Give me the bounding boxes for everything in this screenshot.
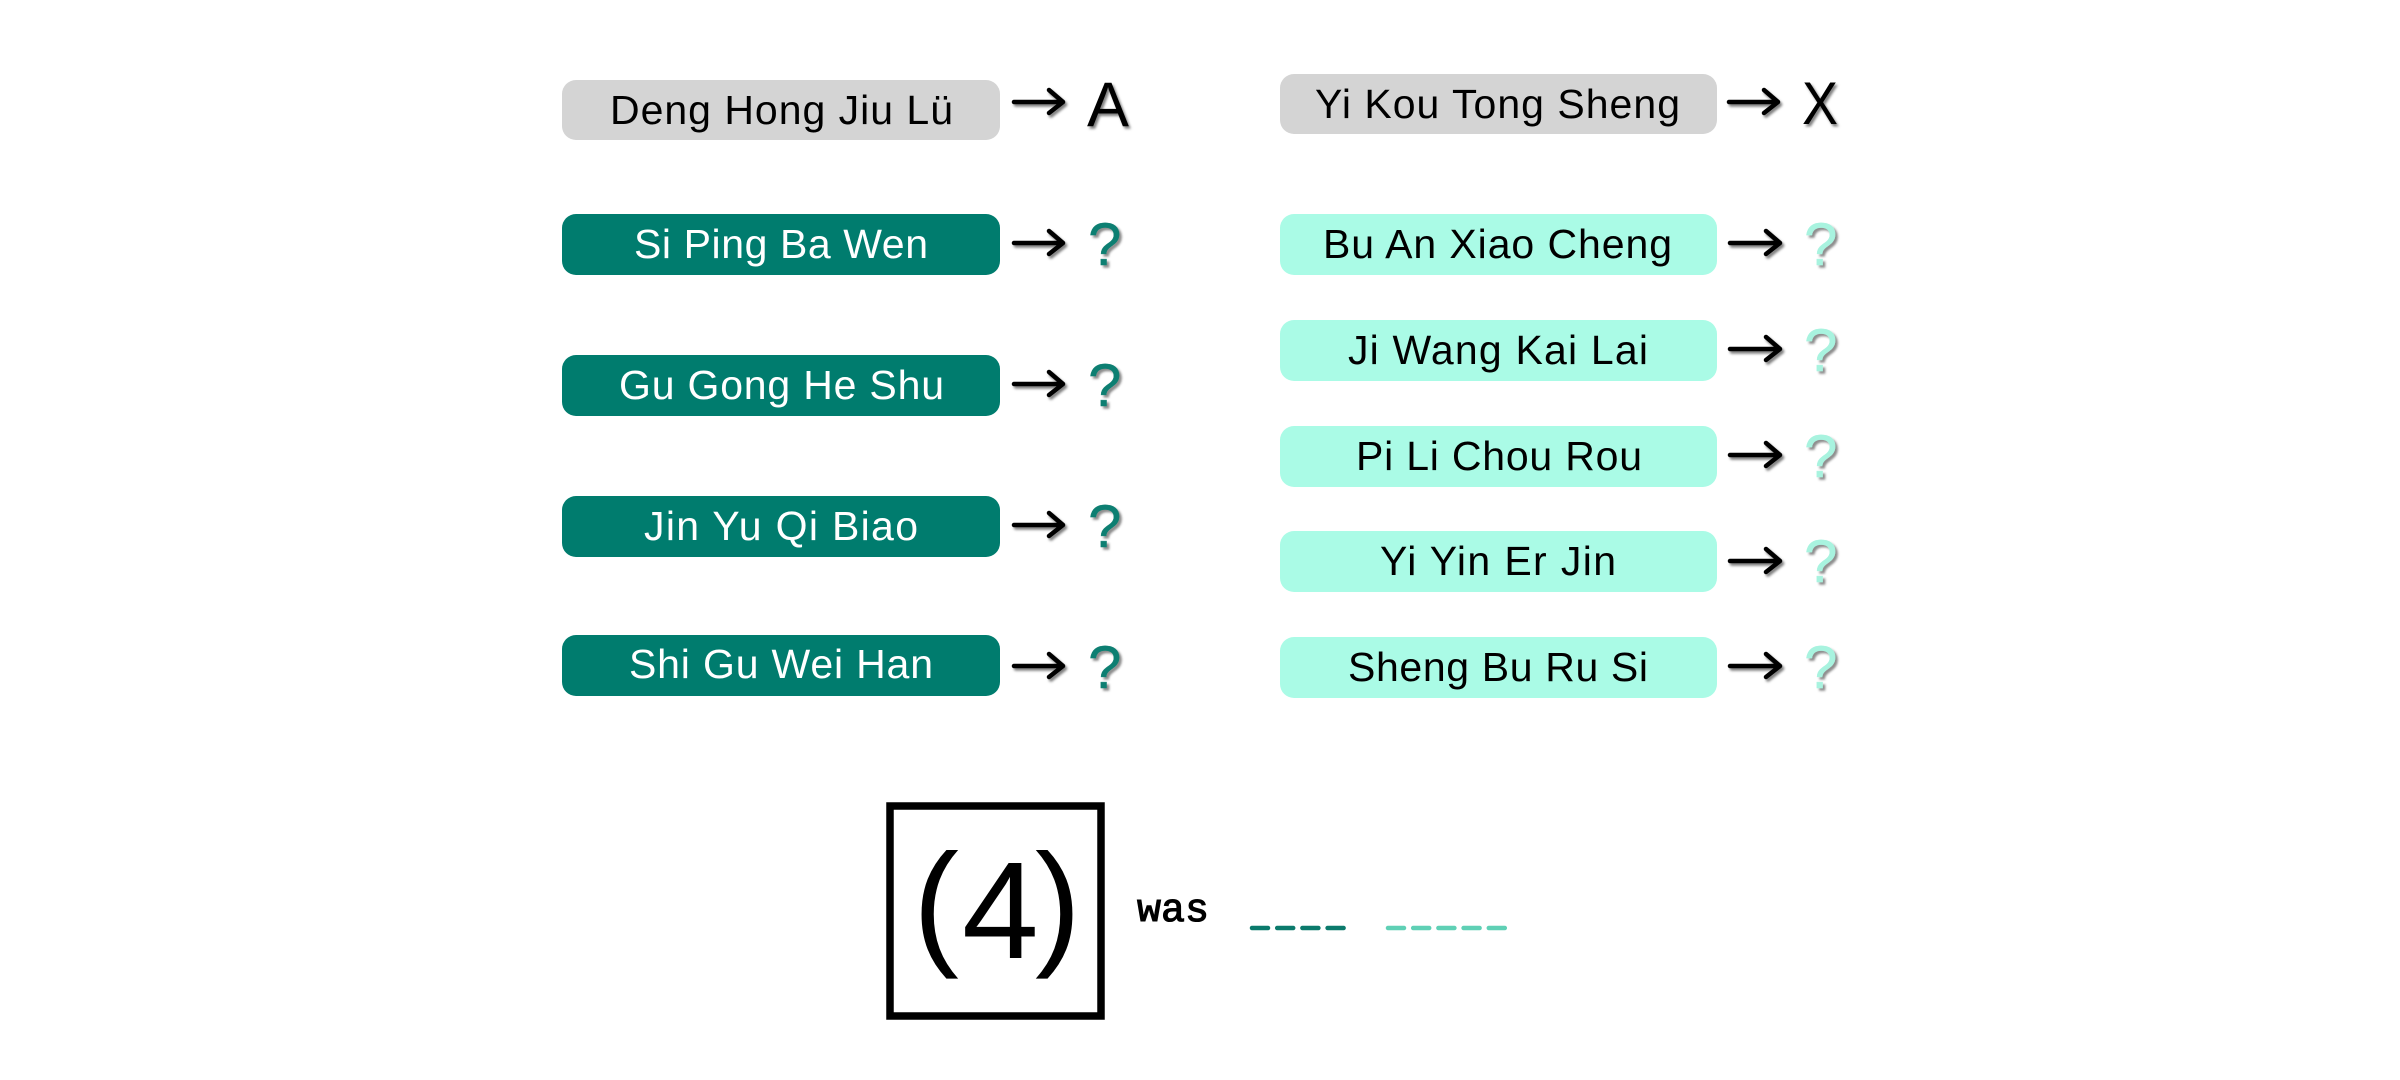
left column: dark teal idioms	[562, 211, 1121, 701]
row: Si Ping Ba Wen	[562, 211, 1121, 278]
row: Shi Gu Wei Han: ?	[1088, 634, 1121, 701]
row: Jin Yu Qi Biao	[562, 493, 1121, 560]
number box: (4)	[890, 806, 1101, 1016]
row: Yi Yin Er Jin	[1280, 528, 1837, 595]
row: Bu An Xiao Cheng: ?	[1804, 211, 1837, 278]
row: Bu An Xiao Cheng: Bu An Xiao Cheng	[1323, 221, 1672, 267]
example row: Deng Hong Jiu Lü maps to A: Deng Hong Jiu Lü	[610, 87, 953, 133]
row: Ji Wang Kai Lai	[1280, 317, 1837, 384]
example row: Yi Kou Tong Sheng maps to X	[1280, 70, 1838, 137]
row: Yi Yin Er Jin: Yi Yin Er Jin	[1380, 538, 1616, 584]
row: Shi Gu Wei Han: Shi Gu Wei Han	[629, 641, 933, 687]
row: Gu Gong He Shu	[562, 352, 1121, 419]
number box: (4): (	[913, 826, 959, 980]
row: Jin Yu Qi Biao: Jin Yu Qi Biao	[644, 503, 918, 549]
row: Sheng Bu Ru Si: Sheng Bu Ru Si	[1348, 644, 1648, 690]
answer sentence: was ---- -----: was	[1137, 889, 1209, 934]
row: Bu An Xiao Cheng	[1280, 211, 1837, 278]
row: Pi Li Chou Rou: Pi Li Chou Rou	[1356, 433, 1642, 479]
row: Yi Yin Er Jin: ?	[1804, 528, 1837, 595]
example row: Deng Hong Jiu Lü maps to A: A	[1087, 70, 1129, 140]
row: Sheng Bu Ru Si: ?	[1804, 634, 1837, 701]
row: Sheng Bu Ru Si	[1280, 634, 1837, 701]
example row: Deng Hong Jiu Lü maps to A	[562, 70, 1129, 140]
row: Gu Gong He Shu: Gu Gong He Shu	[619, 362, 944, 408]
mint answer blanks	[1388, 926, 1506, 930]
row: Ji Wang Kai Lai: Ji Wang Kai Lai	[1348, 327, 1648, 373]
row: Gu Gong He Shu: ?	[1088, 352, 1121, 419]
teal answer blanks	[1252, 926, 1345, 930]
row: Pi Li Chou Rou: ?	[1804, 423, 1837, 490]
row: Si Ping Ba Wen: ?	[1088, 211, 1121, 278]
row: Jin Yu Qi Biao: ?	[1088, 493, 1121, 560]
row: Shi Gu Wei Han	[562, 634, 1121, 701]
right column: mint idioms	[1280, 211, 1837, 701]
row: Ji Wang Kai Lai: ?	[1804, 317, 1837, 384]
number box: (4): )	[1035, 826, 1081, 980]
example row: Yi Kou Tong Sheng maps to X: X	[1802, 70, 1838, 137]
example row: Yi Kou Tong Sheng maps to X: Yi Kou Tong Sheng	[1315, 81, 1680, 127]
row: Pi Li Chou Rou	[1280, 423, 1837, 490]
number box: (4): 4	[962, 834, 1039, 988]
row: Si Ping Ba Wen: Si Ping Ba Wen	[634, 221, 928, 267]
